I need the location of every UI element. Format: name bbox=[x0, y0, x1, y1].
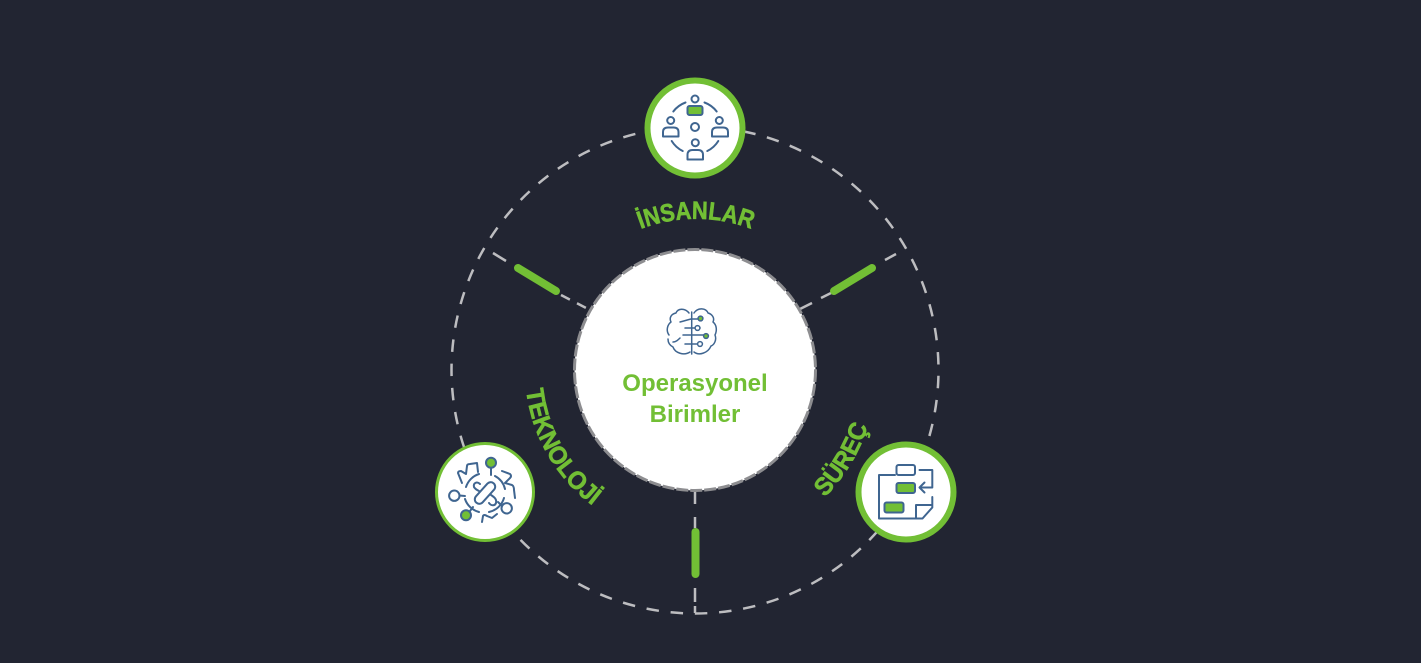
label: İNSANLAR: İNSANLAR bbox=[634, 201, 754, 230]
radial connector: upper right bbox=[800, 254, 896, 309]
green segment: bottom bbox=[692, 532, 700, 574]
icon badge: technology bbox=[436, 444, 534, 540]
label: SÜREÇ: SÜREÇ bbox=[814, 422, 870, 496]
green segment: upper right bbox=[834, 268, 872, 291]
outer dashed ring bbox=[452, 126, 938, 614]
heading: Operasyonel Birimler: Birimler bbox=[650, 401, 740, 428]
icon badge: process bbox=[858, 444, 954, 540]
radial connector: upper left bbox=[493, 253, 590, 310]
heading: Operasyonel Birimler: Operasyonel bbox=[622, 370, 768, 397]
label: TEKNOLOJİ: TEKNOLOJİ bbox=[526, 387, 605, 506]
radial connector: bottom bbox=[694, 490, 696, 613]
icon badge: people bbox=[648, 80, 742, 176]
icon: brain bbox=[667, 309, 716, 354]
center circle bbox=[574, 250, 816, 490]
green segment: upper left bbox=[518, 268, 556, 291]
